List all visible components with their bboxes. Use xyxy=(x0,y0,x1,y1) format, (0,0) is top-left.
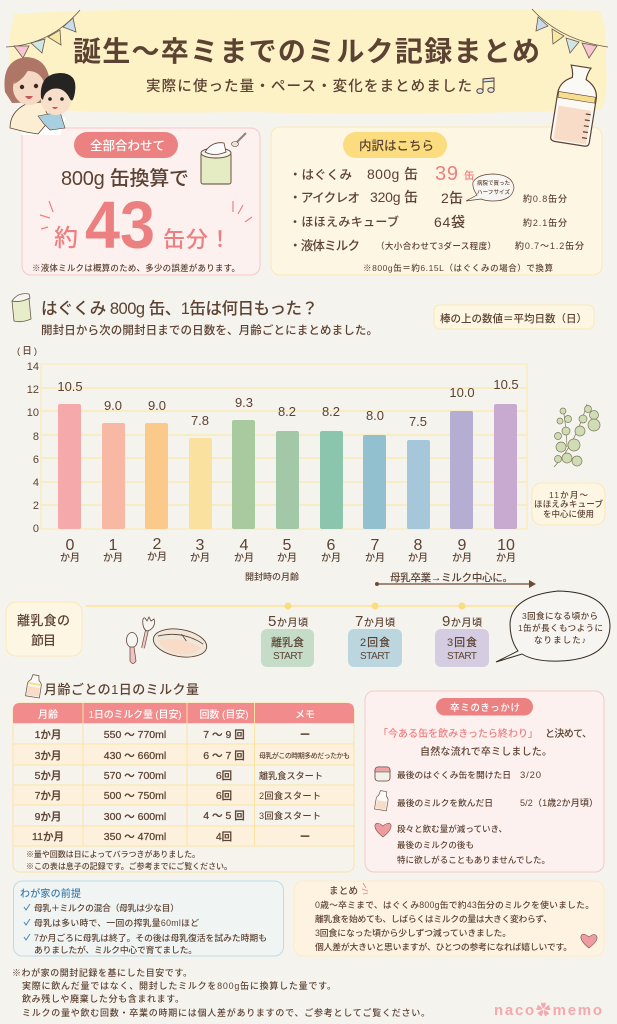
icon: mother and baby xyxy=(4,57,75,135)
value labels: 9.0 xyxy=(148,398,166,413)
footnote: 実際に飲んだ量ではなく、開封したミルクを800g缶に換算した量です。 xyxy=(22,980,336,991)
bunting right xyxy=(532,9,608,58)
icon: music notes xyxy=(477,78,494,93)
row: 9 months: 3回食スタート xyxy=(259,810,321,821)
axis unit: (日) xyxy=(17,346,37,357)
x axis labels: か月 xyxy=(147,551,167,563)
row: hohoemi: 約2.1缶分 xyxy=(523,217,567,228)
lead text: と決めて、 xyxy=(545,727,592,740)
x axis labels: 10 xyxy=(497,537,515,554)
pill: all combined: 全部合わせて xyxy=(90,138,165,153)
x axis labels: か月 xyxy=(365,552,385,564)
footnote: ミルクの量や飲む回数・卒業の時期には個人差がありますので、ご参考としてご覧ください。 xyxy=(22,1007,430,1018)
milestone: 7 months: 7か月頃 xyxy=(355,613,395,630)
x axis labels: 3 xyxy=(196,537,205,554)
value labels: 7.8 xyxy=(191,413,209,428)
row: 1 month: 1か月 xyxy=(35,729,61,741)
y axis labels: 2 xyxy=(33,500,39,512)
summary text: 個人差が大きいと思いますが、ひとつの参考になれば嬉しいです。 xyxy=(315,941,572,952)
list text: ありましたが、ミルク中心で育てました。 xyxy=(34,944,197,955)
milestone: 9 months: 3回食 xyxy=(447,635,477,649)
speech bubble xyxy=(496,591,610,662)
row: 11 months: 350 〜 470ml xyxy=(104,831,166,843)
row: last can opened xyxy=(397,769,541,781)
header row: 回数 (目安) xyxy=(200,708,248,721)
panel: weaning trigger xyxy=(365,691,604,872)
icon: heart xyxy=(375,823,391,837)
row: 3 months: 母乳がこの時期多めだったかも xyxy=(259,751,350,760)
panel: breakdown xyxy=(271,127,602,275)
icon: tableware xyxy=(126,617,209,664)
heading: わが家の前提 xyxy=(20,887,81,900)
row: 11 months xyxy=(32,831,310,843)
x axis labels: 1 xyxy=(109,537,118,554)
x axis labels: 7 xyxy=(371,537,380,554)
row: liquid milk: ・液体ミルク xyxy=(289,239,360,253)
row: 7 months xyxy=(35,790,321,802)
logo: naco✿memo xyxy=(494,1002,602,1019)
x axis labels: か月 xyxy=(60,552,80,564)
milestone: 7 months: 2回食 xyxy=(360,635,390,649)
x axis labels: か月 xyxy=(408,552,428,564)
note: from 11 months: を中心に使用 xyxy=(543,509,594,519)
row: liquid milk: 約0.7〜1.2缶分 xyxy=(515,240,584,251)
table notes xyxy=(26,849,232,871)
legend note xyxy=(434,305,594,329)
pill: breakdown heading: 内訳はこちら xyxy=(359,138,434,153)
icon: milk can and spoon xyxy=(201,133,246,184)
value labels xyxy=(57,377,519,429)
header row: メモ xyxy=(295,710,315,721)
row: 5 months: 5か月 xyxy=(35,770,61,782)
x axis labels: か月 xyxy=(496,552,516,564)
milestone: 5 months: 離乳食 xyxy=(271,635,304,649)
row: icreo: ・アイクレオ xyxy=(289,191,360,205)
row: 11 months: 11か月 xyxy=(32,831,64,843)
closing text: 段々と飲む量が減っていき、 xyxy=(397,824,507,834)
big number 43: 43 xyxy=(85,188,155,263)
heading: まとめ xyxy=(329,886,358,897)
list text: 母乳＋ミルクの混合（母乳は少な目） xyxy=(34,902,179,913)
speech bubble: 1缶が長くもつように xyxy=(518,623,603,633)
y axis labels: 10 xyxy=(27,407,39,419)
value labels: 10.5 xyxy=(57,379,83,394)
x axis labels: か月 xyxy=(277,552,297,564)
sparkle marks xyxy=(40,201,252,229)
row: icreo: 2缶 xyxy=(441,190,463,206)
label: weaning milestones xyxy=(6,602,82,656)
row: 3 months xyxy=(35,750,350,762)
timeline line xyxy=(86,605,520,607)
value labels: 8.2 xyxy=(278,404,296,419)
row: 5 months: 570 〜 700ml xyxy=(104,770,166,782)
x axis title: 開封時の月齢 xyxy=(245,571,299,582)
panel: our premise xyxy=(14,881,284,956)
milestone: 9 months: 9か月頃 xyxy=(442,613,482,630)
row: 9 months: 9か月 xyxy=(35,811,61,823)
chart heading: はぐくみ 800g 缶、1缶は何日もった？ xyxy=(41,299,318,318)
row: 5 months xyxy=(35,770,323,782)
lead text: 「今ある缶を飲みきったら終わり」 xyxy=(378,727,538,740)
big number 43 xyxy=(54,188,231,263)
list text: 母乳は多い時で、一回の搾乳量60mlほど xyxy=(34,917,199,928)
x axis labels: か月 xyxy=(103,552,123,564)
summary text: 離乳食を始めても、しばらくはミルクの量は大きく変わらず、 xyxy=(315,913,552,924)
summary text: 0歳〜卒ミまで、はぐくみ800g缶で約43缶分のミルクを使いました。 xyxy=(315,899,594,910)
row: 11 months: ー xyxy=(300,831,310,843)
y axis labels: 8 xyxy=(33,431,39,443)
row: 7 months: 6回 xyxy=(216,790,232,802)
row: icreo: 320g 缶 xyxy=(370,189,418,205)
row: last milk: 5/2（1歳2か月頃） xyxy=(520,797,598,808)
header row xyxy=(38,708,315,721)
row: hagukumi xyxy=(289,163,474,185)
footnote: 飲み残しや廃棄した分も含まれます。 xyxy=(22,993,184,1004)
x axis labels: 8 xyxy=(414,537,423,554)
row: hohoemi xyxy=(289,214,567,230)
x axis labels xyxy=(60,536,516,564)
closing text xyxy=(397,824,550,865)
icon: small bottle xyxy=(26,674,43,698)
row: 7 months: 7か月 xyxy=(35,790,61,802)
title: 誕生〜卒ミまでのミルク記録まとめ xyxy=(73,36,540,67)
row: hohoemi: ・ほほえみキューブ xyxy=(289,214,399,229)
row: 3 months: 430 〜 660ml xyxy=(104,750,166,762)
row: last milk: 最後のミルクを飲んだ日 xyxy=(397,797,493,808)
x axis labels: 6 xyxy=(327,537,336,554)
pill heading xyxy=(436,698,533,716)
x axis labels: 0 xyxy=(66,537,75,554)
callout: half size: ハーフサイズ xyxy=(477,188,510,196)
arrow: switch to formula xyxy=(375,571,536,588)
note: conversion: ※800g缶＝約6.15L（はぐくみの場合）で換算 xyxy=(363,263,553,273)
lead text xyxy=(378,727,592,758)
row: 1 month: ー xyxy=(300,729,310,741)
icon: can small xyxy=(12,294,31,322)
row: 1 month: 550 〜 770ml xyxy=(104,729,166,741)
closing text: 最後のミルクの後も xyxy=(397,840,474,850)
row: 5 months: 6回 xyxy=(216,770,232,782)
check marks xyxy=(24,904,30,940)
footnote xyxy=(12,967,430,1018)
milestone: 9 months: START xyxy=(447,651,477,662)
note: from 11 months xyxy=(532,483,605,525)
row: hagukumi: 缶 xyxy=(464,169,474,182)
row: 3 months: 6 〜 7 回 xyxy=(203,750,245,762)
y axis labels: 4 xyxy=(33,477,39,489)
row: last milk xyxy=(397,797,598,808)
milestone: 5 months xyxy=(261,602,314,667)
icon: bottle small xyxy=(375,790,389,811)
value labels: 9.3 xyxy=(235,395,253,410)
milestone: 7 months xyxy=(348,602,402,667)
y axis labels: 12 xyxy=(27,384,39,396)
row: icreo: 約0.8缶分 xyxy=(523,193,567,204)
x axis labels: 2 xyxy=(153,536,162,553)
row: liquid milk: （大小合わせて3ダース程度） xyxy=(376,241,496,251)
list text: 7か月ごろに母乳は終了。その後は母乳復活を試みた時期も xyxy=(34,932,267,943)
bars xyxy=(58,404,517,529)
legend note: 棒の上の数値＝平均日数（日） xyxy=(440,312,587,325)
y axis labels xyxy=(27,361,39,535)
x axis labels: か月 xyxy=(321,552,341,564)
label: weaning milestones: 節目 xyxy=(31,633,56,648)
arrow: switch to formula: 母乳卒業→ミルク中心に。 xyxy=(390,571,513,584)
milestone: 5 months: 5か月頃 xyxy=(268,613,308,630)
footnote: ※わが家の開封記録を基にした目安です。 xyxy=(12,967,192,978)
note: liquid milk: ※液体ミルクは概算のため、多少の誤差があります。 xyxy=(32,263,240,273)
row: 11 months: 4回 xyxy=(216,831,232,843)
row: 7 months: 2回食スタート xyxy=(259,790,321,801)
milestone: 7 months: START xyxy=(360,651,390,662)
closing text: 特に欲しがることもありませんでした。 xyxy=(397,855,550,865)
list text xyxy=(34,902,267,955)
speech bubble: なりました♪ xyxy=(534,635,586,645)
callout: half size xyxy=(466,174,514,201)
big number 43: 約 xyxy=(54,225,78,252)
header row: 月齢 xyxy=(38,708,58,721)
y axis labels: 6 xyxy=(33,454,39,466)
header banner xyxy=(9,9,607,114)
pill heading: 卒ミのきっかけ xyxy=(450,702,520,714)
value labels: 10.5 xyxy=(493,377,519,392)
bar chart xyxy=(17,346,527,582)
y axis labels: 14 xyxy=(27,361,39,373)
row: 5 months: 離乳食スタート xyxy=(259,770,323,781)
big number 43: 缶分！ xyxy=(163,227,231,252)
x axis labels: 4 xyxy=(240,537,249,554)
summary text: 3回食になった頃から少しずつ減っていきました。 xyxy=(315,927,511,938)
panel: total cans xyxy=(22,128,260,275)
x axis labels: か月 xyxy=(190,552,210,564)
row: hagukumi: ・はぐくみ xyxy=(289,168,352,182)
table notes: ※この表は息子の記録です。ご参考までにご覧ください。 xyxy=(26,861,232,871)
row: liquid milk xyxy=(289,239,584,253)
panel: summary xyxy=(294,881,604,956)
x axis labels: か月 xyxy=(452,552,472,564)
note: from 11 months: ほほえみキューブ xyxy=(534,499,603,509)
value labels: 9.0 xyxy=(104,398,122,413)
label: weaning milestones: 離乳食の xyxy=(17,613,70,628)
callout: half size: 病院で買った xyxy=(477,179,510,187)
x axis labels: 5 xyxy=(283,537,292,554)
row: 1 month xyxy=(35,729,310,741)
value labels: 10.0 xyxy=(449,385,475,400)
row: hohoemi: 64袋 xyxy=(434,214,465,230)
bunting left xyxy=(6,10,80,58)
x axis labels: か月 xyxy=(234,552,254,564)
pill: all combined xyxy=(74,132,178,158)
icon: baby bottle xyxy=(550,64,601,147)
note: from 11 months: 11か月〜 xyxy=(549,490,588,500)
row: 3 months: 3か月 xyxy=(35,750,61,762)
row: icreo xyxy=(289,189,567,206)
header row: 1日のミルク量 (目安) xyxy=(88,708,182,721)
chart heading: 開封日から次の開封日までの日数を、月齢ごとにまとめました。 xyxy=(41,323,378,337)
row: last can opened: 最後のはぐくみ缶を開けた日 xyxy=(397,769,511,780)
icon: calendar xyxy=(375,767,390,781)
subtitle: 実際に使った量・ペース・変化をまとめました xyxy=(146,78,472,95)
y axis labels: 0 xyxy=(33,523,39,535)
row: 9 months: 4 〜 5 回 xyxy=(203,810,245,822)
milestone: 5 months: START xyxy=(273,651,303,662)
value labels: 7.5 xyxy=(409,414,427,429)
chart heading xyxy=(41,299,378,337)
icon: eucalyptus xyxy=(554,404,600,467)
x axis labels: 9 xyxy=(458,537,467,554)
milk table xyxy=(13,703,354,872)
row: 1 month: 7 〜 9 回 xyxy=(203,729,245,741)
table heading: 月齢ごとの1日のミルク量 xyxy=(44,682,199,697)
pill: breakdown heading xyxy=(343,132,447,158)
text: 800g can conversion: 800g 缶換算で xyxy=(61,167,189,190)
table notes: ※量や回数は日によってバラつきがありました。 xyxy=(26,849,200,859)
lead text: 自然な流れで卒ミしました。 xyxy=(420,745,552,758)
row: 9 months: 300 〜 600ml xyxy=(104,811,166,823)
summary text xyxy=(315,899,594,952)
row: hagukumi: 800g 缶 xyxy=(367,166,418,182)
row: last can opened: 3/20 xyxy=(520,770,541,781)
value labels: 8.2 xyxy=(322,404,340,419)
value labels: 8.0 xyxy=(366,408,384,423)
icon: heart small xyxy=(581,934,597,948)
speech bubble: 3回食になる頃から xyxy=(522,611,598,621)
milestone: 9 months xyxy=(435,602,489,667)
row: hagukumi: 39 xyxy=(435,163,458,185)
row: 9 months xyxy=(35,810,321,823)
row: 7 months: 500 〜 750ml xyxy=(104,790,166,802)
